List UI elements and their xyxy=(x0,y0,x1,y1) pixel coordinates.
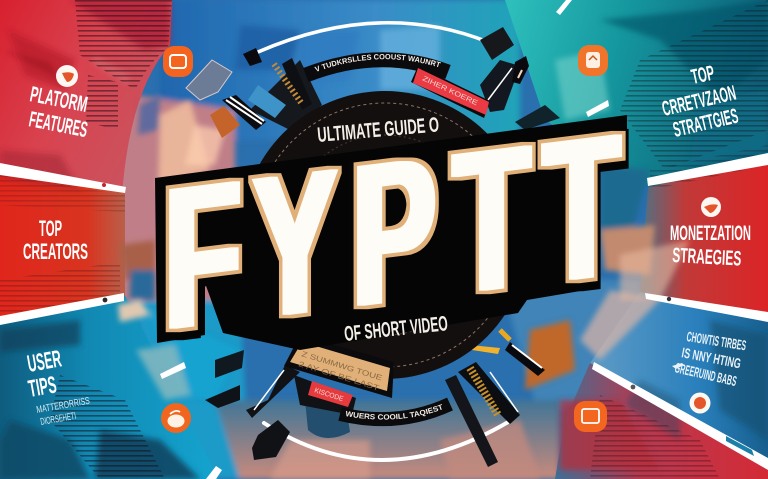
panel: bottom-right tips xyxy=(673,328,747,414)
tan label bottom: Z SUMMWG TOUE xyxy=(300,349,383,382)
small red label xyxy=(308,381,353,407)
heading: top creators: CREATORS xyxy=(23,239,88,264)
heading: top creators: TOP xyxy=(39,216,62,241)
small red label: KISCODE xyxy=(313,387,344,403)
small caption: user tips: MATTERORRISS xyxy=(36,396,91,416)
red label top: ZIHER KOERE xyxy=(421,75,479,107)
heading: top creators xyxy=(23,216,88,264)
top curved banner xyxy=(304,52,451,82)
panel: platform features xyxy=(27,65,90,142)
heading: user tips: TIPS xyxy=(26,371,59,403)
heading: top creatization strategies xyxy=(660,62,740,142)
heading: top creatization strategies: TOP xyxy=(689,62,717,89)
icon: top-right orange badge xyxy=(578,45,608,76)
tan label bottom xyxy=(284,335,394,398)
icon: top-left orange badge xyxy=(163,46,193,77)
outer white arc top xyxy=(258,23,488,52)
top curved banner: V TUDKRSLLES COOUST WAUNRT xyxy=(314,54,441,72)
title black backing xyxy=(155,115,627,350)
central dark disc xyxy=(241,91,529,379)
icon: bottom-right badge xyxy=(690,392,710,414)
heading: platform features xyxy=(27,81,90,142)
icon: platform features badge xyxy=(56,65,78,87)
heading: platform features: PLATORM xyxy=(28,81,90,117)
heading: user tips: USER xyxy=(25,345,64,378)
small caption: user tips: DIORSEHETI xyxy=(40,411,77,428)
red label top xyxy=(411,66,490,118)
tan label bottom: 2 AY OF BE LAST xyxy=(297,359,381,393)
bottom curved banner xyxy=(338,398,453,426)
icon: monetization badge xyxy=(701,197,721,217)
kicker: ultimate guide: ULTIMATE GUIDE O xyxy=(316,113,440,147)
heading: user tips xyxy=(25,345,64,403)
panel: user tips xyxy=(25,345,91,428)
main title FYPTT: FYPTT xyxy=(164,90,620,373)
heading: platform features: FEATURES xyxy=(27,106,90,142)
icon: bottom-left orange badge xyxy=(161,403,191,433)
small caption: user tips xyxy=(36,396,91,428)
heading: monetization strategies xyxy=(670,222,751,271)
outer white arc bottom xyxy=(264,421,510,460)
machinery ring xyxy=(186,27,560,467)
panel: monetization strategies xyxy=(670,197,751,271)
icon: bottom-right orange badge xyxy=(574,401,607,432)
bottom curved banner: WUERS COOILL TAQIEST xyxy=(346,404,442,420)
text block: bottom-right tips xyxy=(673,328,747,389)
subtitle: of short video: OF SHORT VIDEO xyxy=(343,312,449,346)
